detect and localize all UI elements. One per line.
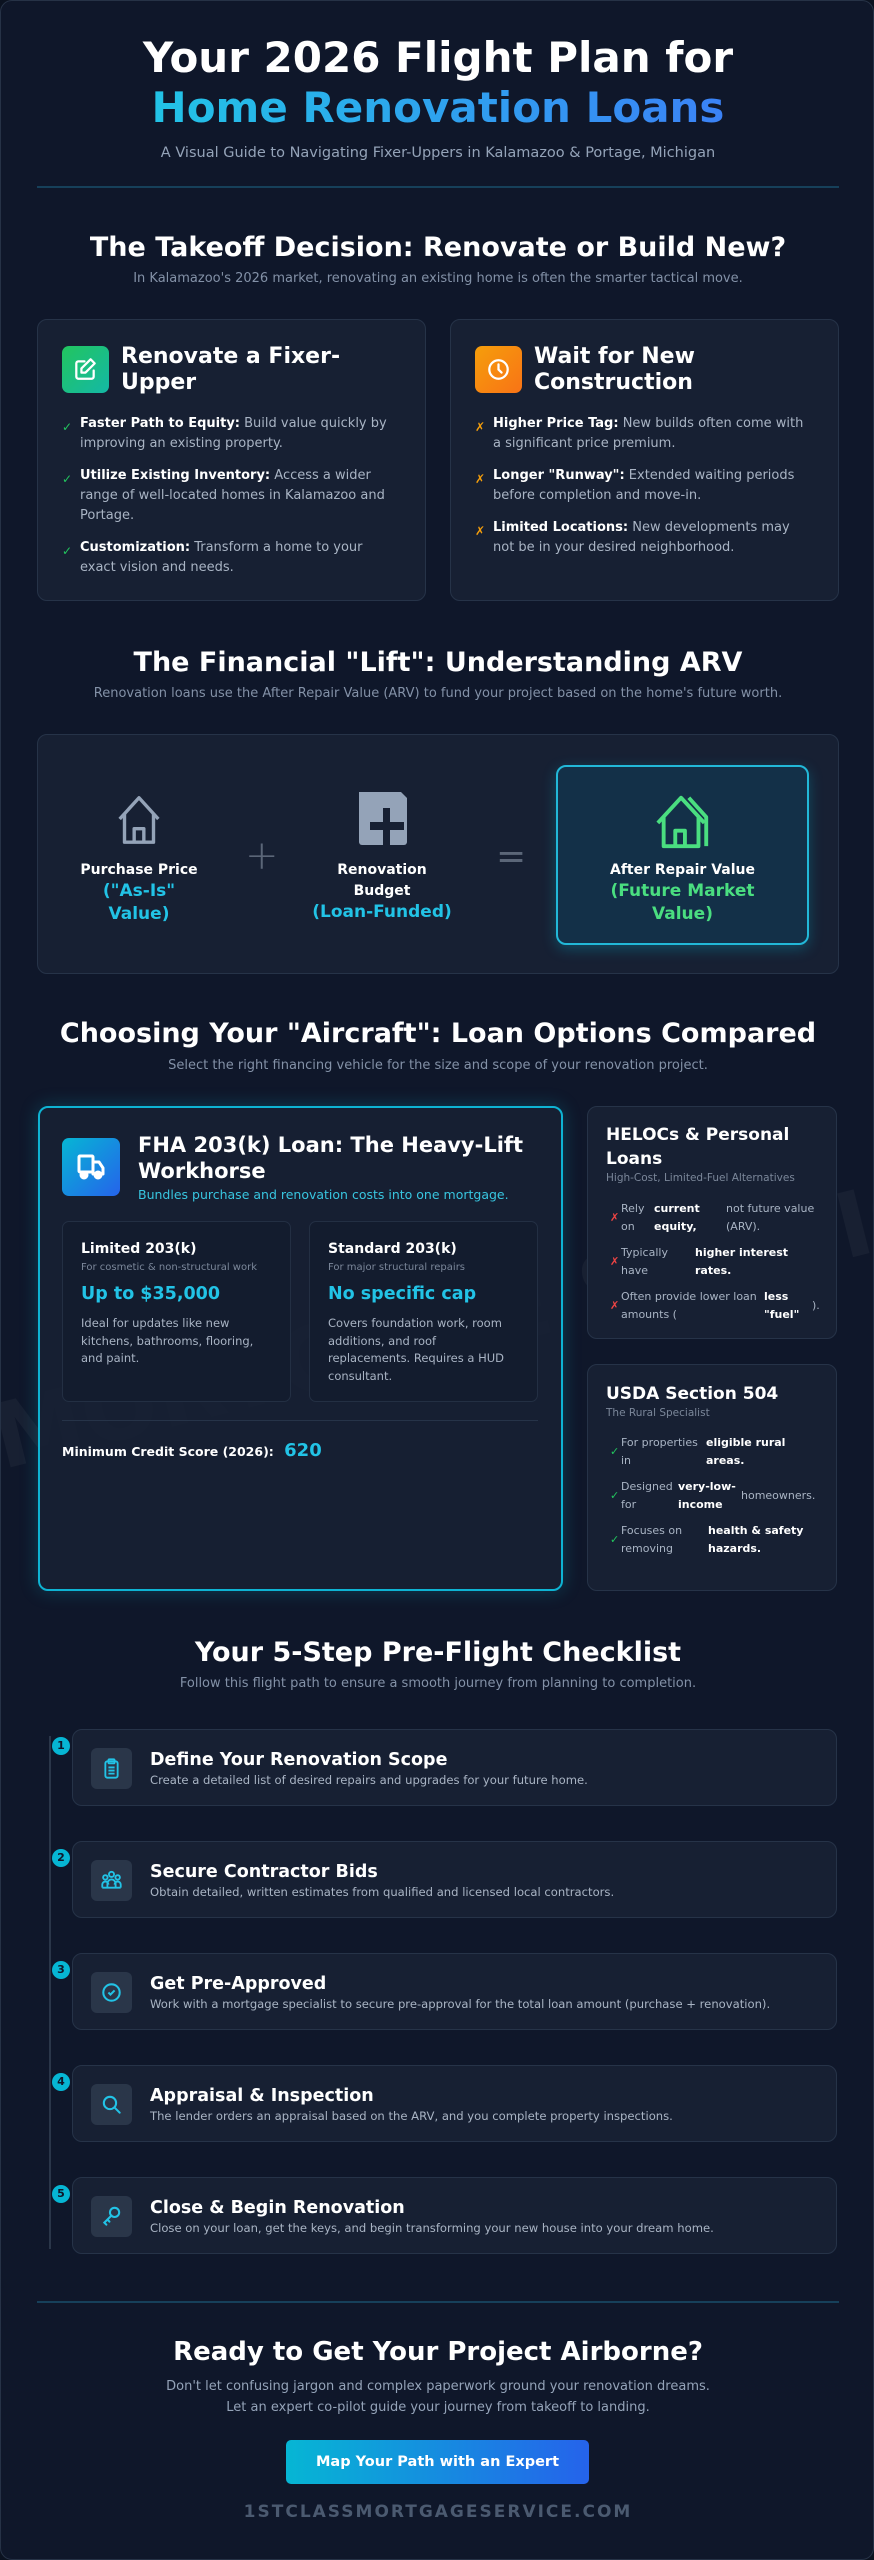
CTA text: Let an expert co-pilot guide your journey from takeoff to landing. (226, 2400, 650, 2415)
sub-card: limited: Ideal for updates like new kitchens, bathrooms, flooring, and paint. (81, 1316, 253, 1365)
panel: USDA: Designed for (621, 1480, 673, 1510)
panel: HELOCs: Often provide lower loan amounts ( (621, 1290, 757, 1320)
panel: HELOCs: HELOCs & Personal Loans (606, 1125, 789, 1169)
sub-card: standard: Covers foundation work, room additions, and roof replacements. Requires a HUD consultant. (328, 1316, 504, 1382)
step 3: Get Pre-Approved (150, 1974, 326, 1994)
badge 5 (52, 2185, 70, 2203)
panel: FHA 203k (38, 1106, 563, 1591)
badge 3: 3 (57, 1963, 65, 1976)
icon: house (118, 796, 160, 844)
panel: HELOCs: ✗ (610, 1211, 619, 1224)
item: renovation budget (312, 792, 452, 922)
sub-card: limited: Up to $35,000 (81, 1284, 220, 1304)
badge 4 (52, 2073, 70, 2091)
title (142, 33, 733, 132)
panel: HELOCs: ✗ (610, 1255, 619, 1268)
step 5: Close & Begin Renovation (150, 2198, 405, 2218)
heading: Wait for New Construction (534, 344, 695, 395)
step 3 (72, 1953, 837, 2030)
CTA text (166, 2379, 710, 2415)
footer domain: 1STCLASSMORTGAGESERVICE.COM (244, 2502, 632, 2522)
sub-card: standard (309, 1221, 538, 1402)
item: purchase price: Purchase Price (80, 862, 198, 878)
panel: HELOCs: ). (812, 1299, 820, 1312)
subheading: Follow this flight path to ensure a smooth journey from planning to completion. (180, 1676, 696, 1691)
list: ✓ (62, 472, 72, 486)
item: ARV result (556, 765, 809, 945)
list: ✗ (475, 420, 485, 434)
badge 1: 1 (57, 1739, 65, 1752)
subheading: Renovation loans use the After Repair Value (ARV) to fund your project based on the home's future worth. (94, 686, 782, 701)
panel: HELOCs: not future value (ARV). (726, 1202, 814, 1232)
panel: USDA: ✓ (610, 1533, 619, 1546)
panel: USDA: ✓ (610, 1489, 619, 1502)
plus: + (245, 833, 279, 879)
sub-card: standard: Standard 203(k) (328, 1241, 457, 1257)
heading: FHA 203(k) Loan: The Heavy-Lift Workhorse (138, 1133, 523, 1183)
step 1 (72, 1729, 837, 1806)
CTA button: Map Your Path with an Expert (316, 2454, 559, 2470)
credit score: Minimum Credit Score (2026): 620 (62, 1440, 322, 1461)
panel: HELOCs: current equity, (654, 1202, 700, 1232)
item: renovation budget: (Loan-Funded) (312, 902, 452, 922)
CTA text: Don't let confusing jargon and complex paperwork ground your renovation dreams. (166, 2379, 710, 2394)
list: ✗ (475, 524, 485, 538)
step 4 (72, 2065, 837, 2142)
panel: USDA: Focuses on removing (621, 1524, 682, 1554)
panel: USDA (587, 1364, 837, 1591)
sub-card: standard: No specific cap (328, 1284, 476, 1304)
panel: HELOCs: Typically have (621, 1246, 668, 1276)
icon: green house (656, 796, 708, 848)
item: purchase price (80, 796, 198, 924)
list: Limited Locations: New developments may not be in your desired neighborhood. (493, 520, 790, 555)
subheading: Select the right financing vehicle for the size and scope of your renovation project. (168, 1058, 708, 1073)
item: renovation budget: Renovation Budget (337, 862, 427, 899)
panel: USDA: eligible rural areas. (706, 1436, 785, 1466)
step 2: Obtain detailed, written estimates from qualified and licensed local contractors. (150, 1885, 614, 1899)
equals: = (496, 836, 526, 877)
subtitle: A Visual Guide to Navigating Fixer-Uppers in Kalamazoo & Portage, Michigan (161, 145, 715, 161)
icon: clock (475, 346, 522, 393)
list (62, 416, 387, 575)
panel: HELOCs (587, 1106, 837, 1339)
panel: USDA: For properties in (621, 1436, 698, 1466)
panel: HELOCs: less "fuel" (764, 1290, 799, 1320)
step 3: Work with a mortgage specialist to secure pre-approval for the total loan amount (purchase + renovation). (150, 1997, 770, 2011)
sub-card: limited: Limited 203(k) (81, 1241, 197, 1257)
panel: USDA: very-low-income (678, 1480, 736, 1510)
panel: HELOCs: Rely on (621, 1202, 644, 1232)
list: Utilize Existing Inventory: Access a wider range of well-located homes in Kalamazoo and Portage. (80, 468, 385, 523)
list: ✓ (62, 544, 72, 558)
badge 4: 4 (57, 2075, 65, 2088)
badge 2: 2 (57, 1851, 65, 1864)
item: ARV result: (Future Market Value) (610, 881, 754, 924)
badge 3 (52, 1961, 70, 1979)
list: Longer "Runway": Extended waiting periods before completion and move-in. (493, 468, 794, 503)
list: ✗ (475, 472, 485, 486)
icon: document plus (359, 792, 407, 845)
heading: takeoff decision: The Takeoff Decision: Renovate or Build New? (90, 232, 786, 263)
heading: ARV: The Financial "Lift": Understanding ARV (134, 647, 742, 678)
tagline: Bundles purchase and renovation costs into one mortgage. (138, 1187, 509, 1202)
panel: USDA: homeowners. (741, 1489, 815, 1502)
panel: new construction (450, 319, 839, 601)
CTA button (286, 2440, 589, 2484)
icon: clipboard (91, 1748, 132, 1789)
subheading: In Kalamazoo's 2026 market, renovating an existing home is often the smarter tactical move. (133, 271, 743, 286)
step 1: Define Your Renovation Scope (150, 1750, 447, 1770)
icon: truck (62, 1138, 120, 1196)
title: Home Renovation Loans (152, 83, 724, 132)
step 4: The lender orders an appraisal based on the ARV, and you complete property inspections. (150, 2109, 673, 2123)
icon: key (91, 2196, 132, 2237)
step 2: Secure Contractor Bids (150, 1862, 378, 1882)
heading: loan options: Choosing Your "Aircraft": Loan Options Compared (60, 1018, 816, 1049)
list (475, 416, 803, 555)
heading: Renovate a Fixer-Upper (121, 344, 340, 395)
panel: USDA: ✓ (610, 1445, 619, 1458)
badge 2 (52, 1849, 70, 1867)
sub-card: limited (62, 1221, 291, 1402)
panel: HELOCs: higher interest rates. (695, 1246, 788, 1276)
sub-card: standard: For major structural repairs (328, 1262, 465, 1273)
item: purchase price: ("As-Is" Value) (103, 881, 175, 924)
step 5: Close on your loan, get the keys, and begin transforming your new house into your dream home. (150, 2221, 714, 2235)
CTA heading: Ready to Get Your Project Airborne? (173, 2337, 703, 2367)
sub-card: limited: For cosmetic & non-structural work (81, 1262, 257, 1273)
panel: USDA: USDA Section 504 (606, 1384, 778, 1404)
list: Faster Path to Equity: Build value quickly by improving an existing property. (80, 416, 387, 451)
panel: USDA: health & safety hazards. (708, 1524, 803, 1554)
list: Customization: Transform a home to your exact vision and needs. (80, 540, 363, 575)
step 1: Create a detailed list of desired repairs and upgrades for your future home. (150, 1773, 588, 1787)
list: Higher Price Tag: New builds often come with a significant price premium. (493, 416, 803, 451)
title: Your 2026 Flight Plan for (143, 33, 733, 82)
badge 5: 5 (57, 2187, 65, 2200)
panel: HELOCs: High-Cost, Limited-Fuel Alternatives (606, 1172, 795, 1184)
panel: USDA: The Rural Specialist (606, 1407, 710, 1419)
icon: search (91, 2084, 132, 2125)
panel: renovate (37, 319, 426, 601)
icon: people (91, 1860, 132, 1901)
panel: HELOCs: ✗ (610, 1299, 619, 1312)
icon: edit (62, 346, 109, 393)
heading: checklist: Your 5-Step Pre-Flight Checklist (195, 1637, 681, 1668)
icon: check circle (91, 1972, 132, 2013)
item: ARV result: After Repair Value (610, 862, 755, 878)
step 5 (72, 2177, 837, 2254)
panel: ARV equation (37, 734, 839, 974)
badge 1 (52, 1737, 70, 1755)
step 2 (72, 1841, 837, 1918)
step 4: Appraisal & Inspection (150, 2086, 374, 2106)
list: ✓ (62, 420, 72, 434)
